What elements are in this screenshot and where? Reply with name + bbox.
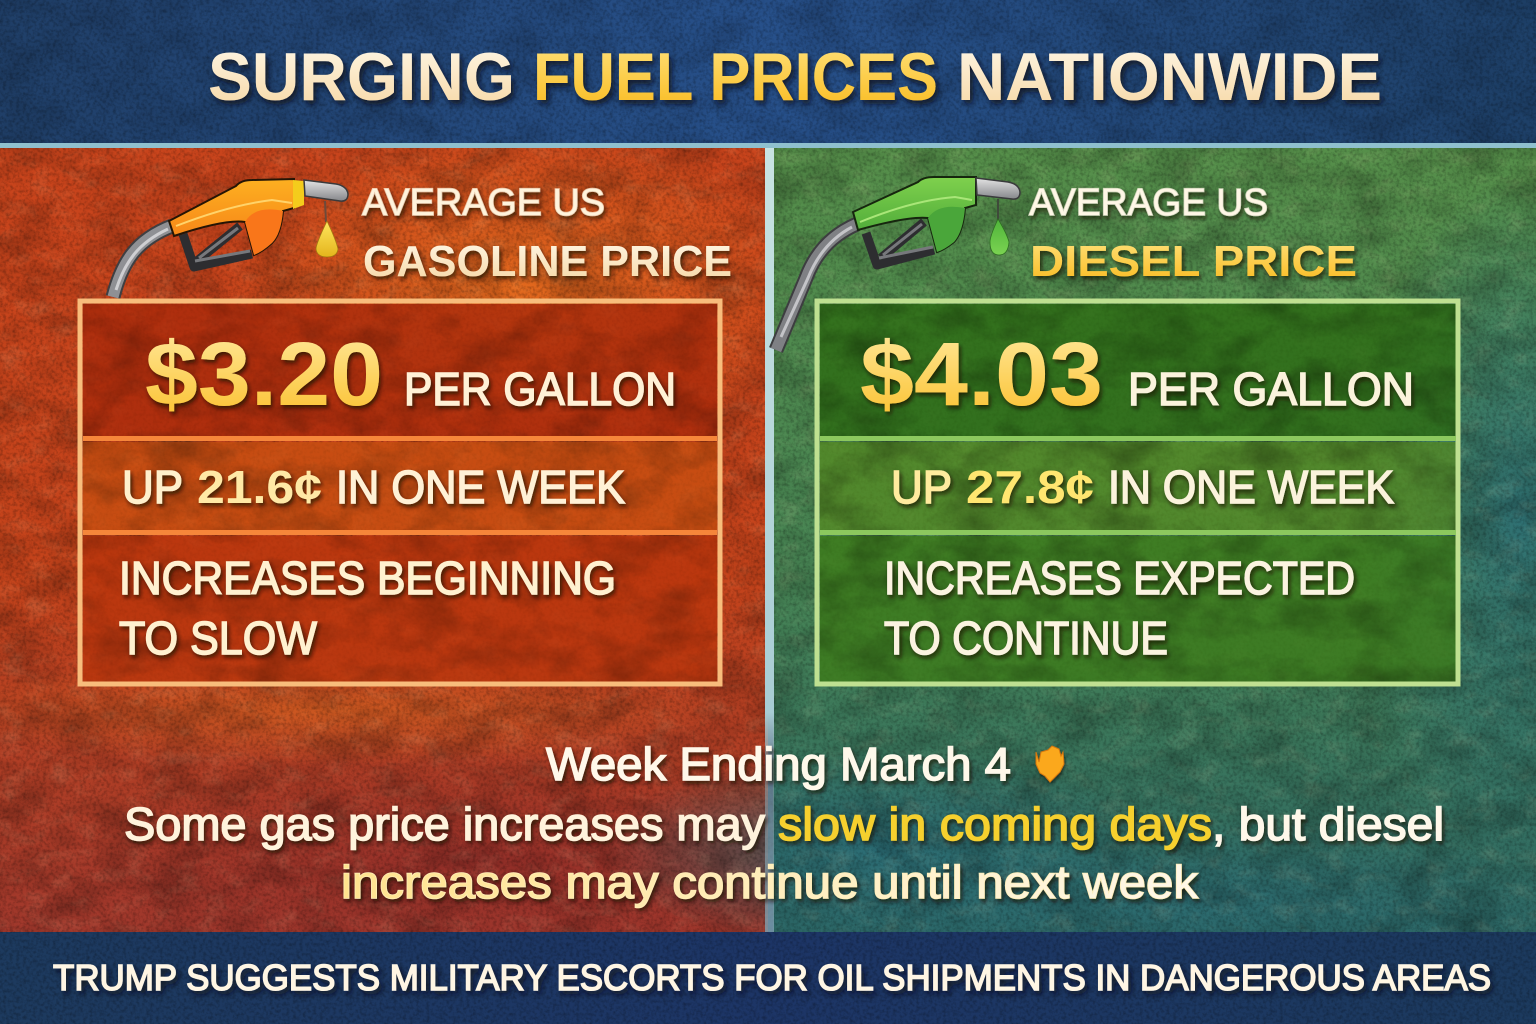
summary text: , but diesel (1212, 798, 1444, 850)
summary text (124, 738, 1444, 908)
weekly change: diesel: 27.8¢ (966, 461, 1094, 513)
title: FUEL PRICES (533, 39, 938, 115)
icon: orange hand (1036, 746, 1064, 782)
price: diesel: $4.03 (860, 325, 1103, 425)
heading: average gasoline price: GASOLINE PRICE (363, 237, 732, 286)
outlook: diesel: INCREASES EXPECTED (884, 552, 1355, 604)
summary text: Week Ending March 4 (546, 738, 1011, 790)
weekly change: gasoline: 21.6¢ (197, 461, 322, 513)
heading: average diesel price: DIESEL PRICE (1030, 237, 1357, 286)
outlook: diesel (884, 552, 1355, 664)
outlook: diesel: TO CONTINUE (884, 612, 1168, 664)
summary text: increases may continue until next week (341, 856, 1199, 908)
price: gasoline: PER GALLON (404, 363, 676, 415)
title: SURGING (208, 39, 515, 115)
panel: diesel price box (817, 301, 1458, 684)
price: diesel: PER GALLON (1128, 363, 1414, 415)
background: diesel side (600, 145, 1536, 980)
footer band (0, 932, 1536, 1024)
icon: gasoline pump nozzle (113, 179, 348, 297)
weekly change: gasoline: IN ONE WEEK (336, 461, 625, 513)
summary text: Some gas price increases may (124, 798, 765, 850)
price: diesel (860, 325, 1414, 425)
summary text: slow in coming days (778, 798, 1212, 850)
icon: diesel pump nozzle (776, 177, 1020, 350)
weekly change: diesel: IN ONE WEEK (1108, 461, 1394, 513)
panel: gasoline price box (80, 301, 720, 684)
outlook: gasoline (119, 552, 616, 664)
weekly change: gasoline: UP (122, 461, 183, 513)
weekly change: diesel: UP (891, 461, 952, 513)
heading: average diesel price (1029, 182, 1357, 286)
heading: average gasoline price: AVERAGE US (362, 182, 605, 224)
weekly change: diesel (891, 461, 1394, 513)
heading: average gasoline price (362, 182, 732, 286)
price: gasoline (145, 325, 676, 425)
footer headline: TRUMP SUGGESTS MILITARY ESCORTS FOR OIL SHIPMENTS IN DANGEROUS AREAS (53, 957, 1491, 998)
title (208, 39, 1382, 115)
outlook: gasoline: TO SLOW (119, 612, 318, 664)
header band (0, 0, 1536, 145)
background: gasoline side (0, 120, 910, 970)
heading: average diesel price: AVERAGE US (1029, 182, 1268, 224)
title: NATIONWIDE (957, 39, 1382, 115)
weekly change: gasoline (122, 461, 625, 513)
price: gasoline: $3.20 (145, 325, 383, 425)
outlook: gasoline: INCREASES BEGINNING (119, 552, 616, 604)
